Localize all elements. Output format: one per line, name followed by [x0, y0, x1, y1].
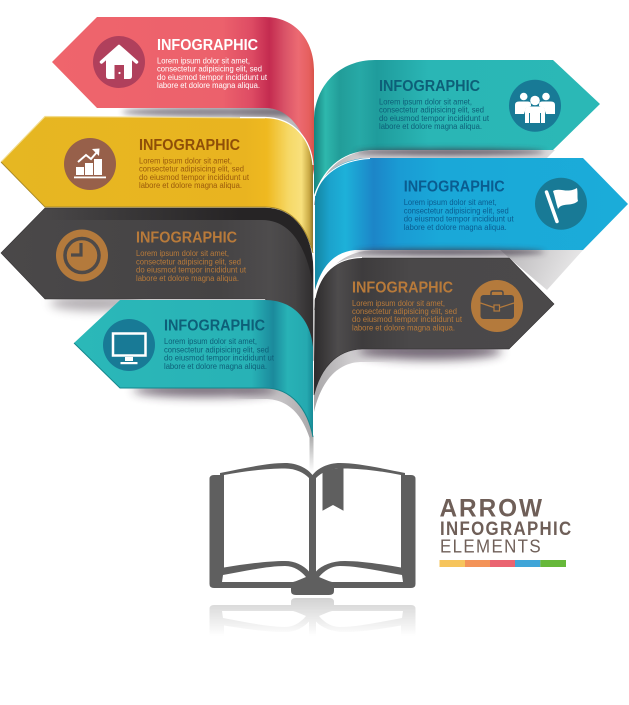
blue ribbon highlight — [315, 158, 370, 196]
panel: red ribbon — [52, 17, 314, 175]
red body text — [157, 56, 268, 90]
icon: monitor — [103, 319, 155, 371]
yellow body text: consectetur adipisicing elit, sed — [139, 165, 244, 174]
dark body text: labore et dolore magna aliqua. — [352, 323, 455, 332]
yellow ribbon bottom edge — [1, 162, 313, 253]
gray fold under left teal ribbon — [230, 388, 313, 450]
dark body text: labore et dolore magna aliqua. — [136, 274, 239, 283]
left teal body text: do eiusmod tempor incididunt ut — [164, 354, 275, 363]
dark body text: do eiusmod tempor incididunt ut — [352, 315, 463, 324]
fading stem above book — [310, 436, 314, 472]
teal body text: consectetur adipisicing elit, sed — [379, 106, 484, 115]
title: infographic: INFOGRAPHIC — [440, 519, 572, 540]
gray fold above right dark ribbon — [314, 250, 509, 310]
red body text: labore et dolore magna aliqua. — [157, 81, 260, 90]
panel: dark ribbon — [1, 208, 313, 360]
dark body text — [352, 299, 463, 332]
icon: clock — [56, 230, 108, 282]
left teal ribbon shape — [74, 300, 313, 437]
left teal body text: Lorem ipsum dolor sit amet, — [164, 337, 257, 346]
panel: right dark ribbon — [314, 248, 554, 395]
yellow ribbon white curl highlight — [240, 118, 313, 165]
colour bar — [440, 560, 566, 567]
blue ribbon shape — [315, 158, 628, 290]
teal body text: Lorem ipsum dolor sit amet, — [379, 98, 472, 106]
yellow body text: labore et dolore magna aliqua. — [139, 181, 242, 190]
book reflection — [210, 598, 416, 629]
icon: briefcase — [471, 280, 523, 332]
blue body text: consectetur adipisicing elit, sed — [404, 206, 509, 215]
red body text: Lorem ipsum dolor sit amet, — [157, 56, 250, 66]
shadow under left teal ribbon — [133, 383, 277, 397]
dark body text: Lorem ipsum dolor sit amet, — [352, 299, 445, 308]
left teal body text: labore et dolore magna aliqua. — [164, 362, 267, 371]
shadow under dark ribbon — [50, 295, 140, 311]
right gray triangular shadow — [500, 240, 592, 290]
blue body text: do eiusmod tempor incididunt ut — [404, 215, 514, 224]
icon: house — [93, 36, 145, 88]
red ribbon shape — [52, 17, 314, 175]
blue body text: Lorem ipsum dolor sit amet, — [404, 198, 497, 207]
yellow body text — [139, 156, 250, 190]
yellow body text: Lorem ipsum dolor sit amet, — [139, 156, 232, 166]
gray fold under right dark ribbon — [314, 349, 400, 412]
teal body text: do eiusmod tempor incididunt ut — [379, 114, 490, 123]
teal body text — [379, 98, 490, 131]
gray fold above blue ribbon — [314, 150, 555, 205]
panel: left teal ribbon — [74, 300, 313, 437]
panel: right teal ribbon — [314, 60, 600, 195]
title: arrow: ARROW — [440, 495, 544, 523]
shadow under blue ribbon — [355, 248, 545, 256]
red heading: INFOGRAPHIC — [157, 37, 258, 54]
dark body text — [136, 249, 247, 283]
dark body text: do eiusmod tempor incididunt ut — [136, 266, 247, 275]
blue heading: INFOGRAPHIC — [404, 179, 505, 196]
yellow heading: INFOGRAPHIC — [139, 137, 240, 154]
dark heading: INFOGRAPHIC — [136, 230, 237, 247]
teal heading: INFOGRAPHIC — [379, 78, 480, 95]
teal ribbon shape — [314, 60, 600, 195]
blue body text — [404, 198, 514, 232]
shadow under right teal ribbon — [355, 148, 545, 156]
dark ribbon shape — [1, 208, 313, 360]
yellow ribbon top edge — [1, 116, 265, 162]
left teal body text — [164, 337, 275, 371]
panel: blue ribbon — [314, 148, 628, 290]
dark heading: INFOGRAPHIC — [352, 279, 453, 296]
left teal bottom edge — [74, 343, 313, 437]
dark body text: consectetur adipisicing elit, sed — [136, 257, 241, 266]
dark body text: consectetur adipisicing elit, sed — [352, 307, 457, 316]
icon: open book — [210, 463, 416, 595]
red body text: consectetur adipisicing elit, sed — [157, 65, 262, 74]
gray fold under red ribbon — [230, 108, 313, 170]
icon: growth chart — [64, 138, 116, 190]
left teal heading: INFOGRAPHIC — [164, 318, 265, 335]
dark body text: Lorem ipsum dolor sit amet, — [136, 249, 229, 258]
title block — [440, 495, 572, 557]
red body text: do eiusmod tempor incididunt ut — [157, 73, 268, 82]
dark ribbon highlight — [315, 258, 362, 298]
yellow ribbon shape — [1, 116, 313, 253]
dark ribbon top shading — [92, 208, 313, 283]
dark ribbon shape — [314, 258, 554, 395]
left teal body text: consectetur adipisicing elit, sed — [164, 345, 269, 354]
panel: yellow ribbon — [1, 116, 313, 253]
teal body text: labore et dolore magna aliqua. — [379, 122, 482, 131]
shadow under red ribbon — [122, 107, 322, 117]
shadow under right dark ribbon — [358, 342, 502, 360]
icon: people — [509, 80, 561, 132]
icon: flag — [535, 178, 587, 230]
yellow body text: do eiusmod tempor incididunt ut — [139, 173, 250, 182]
title: elements: ELEMENTS — [440, 536, 542, 557]
blue body text: labore et dolore magna aliqua. — [404, 223, 507, 232]
